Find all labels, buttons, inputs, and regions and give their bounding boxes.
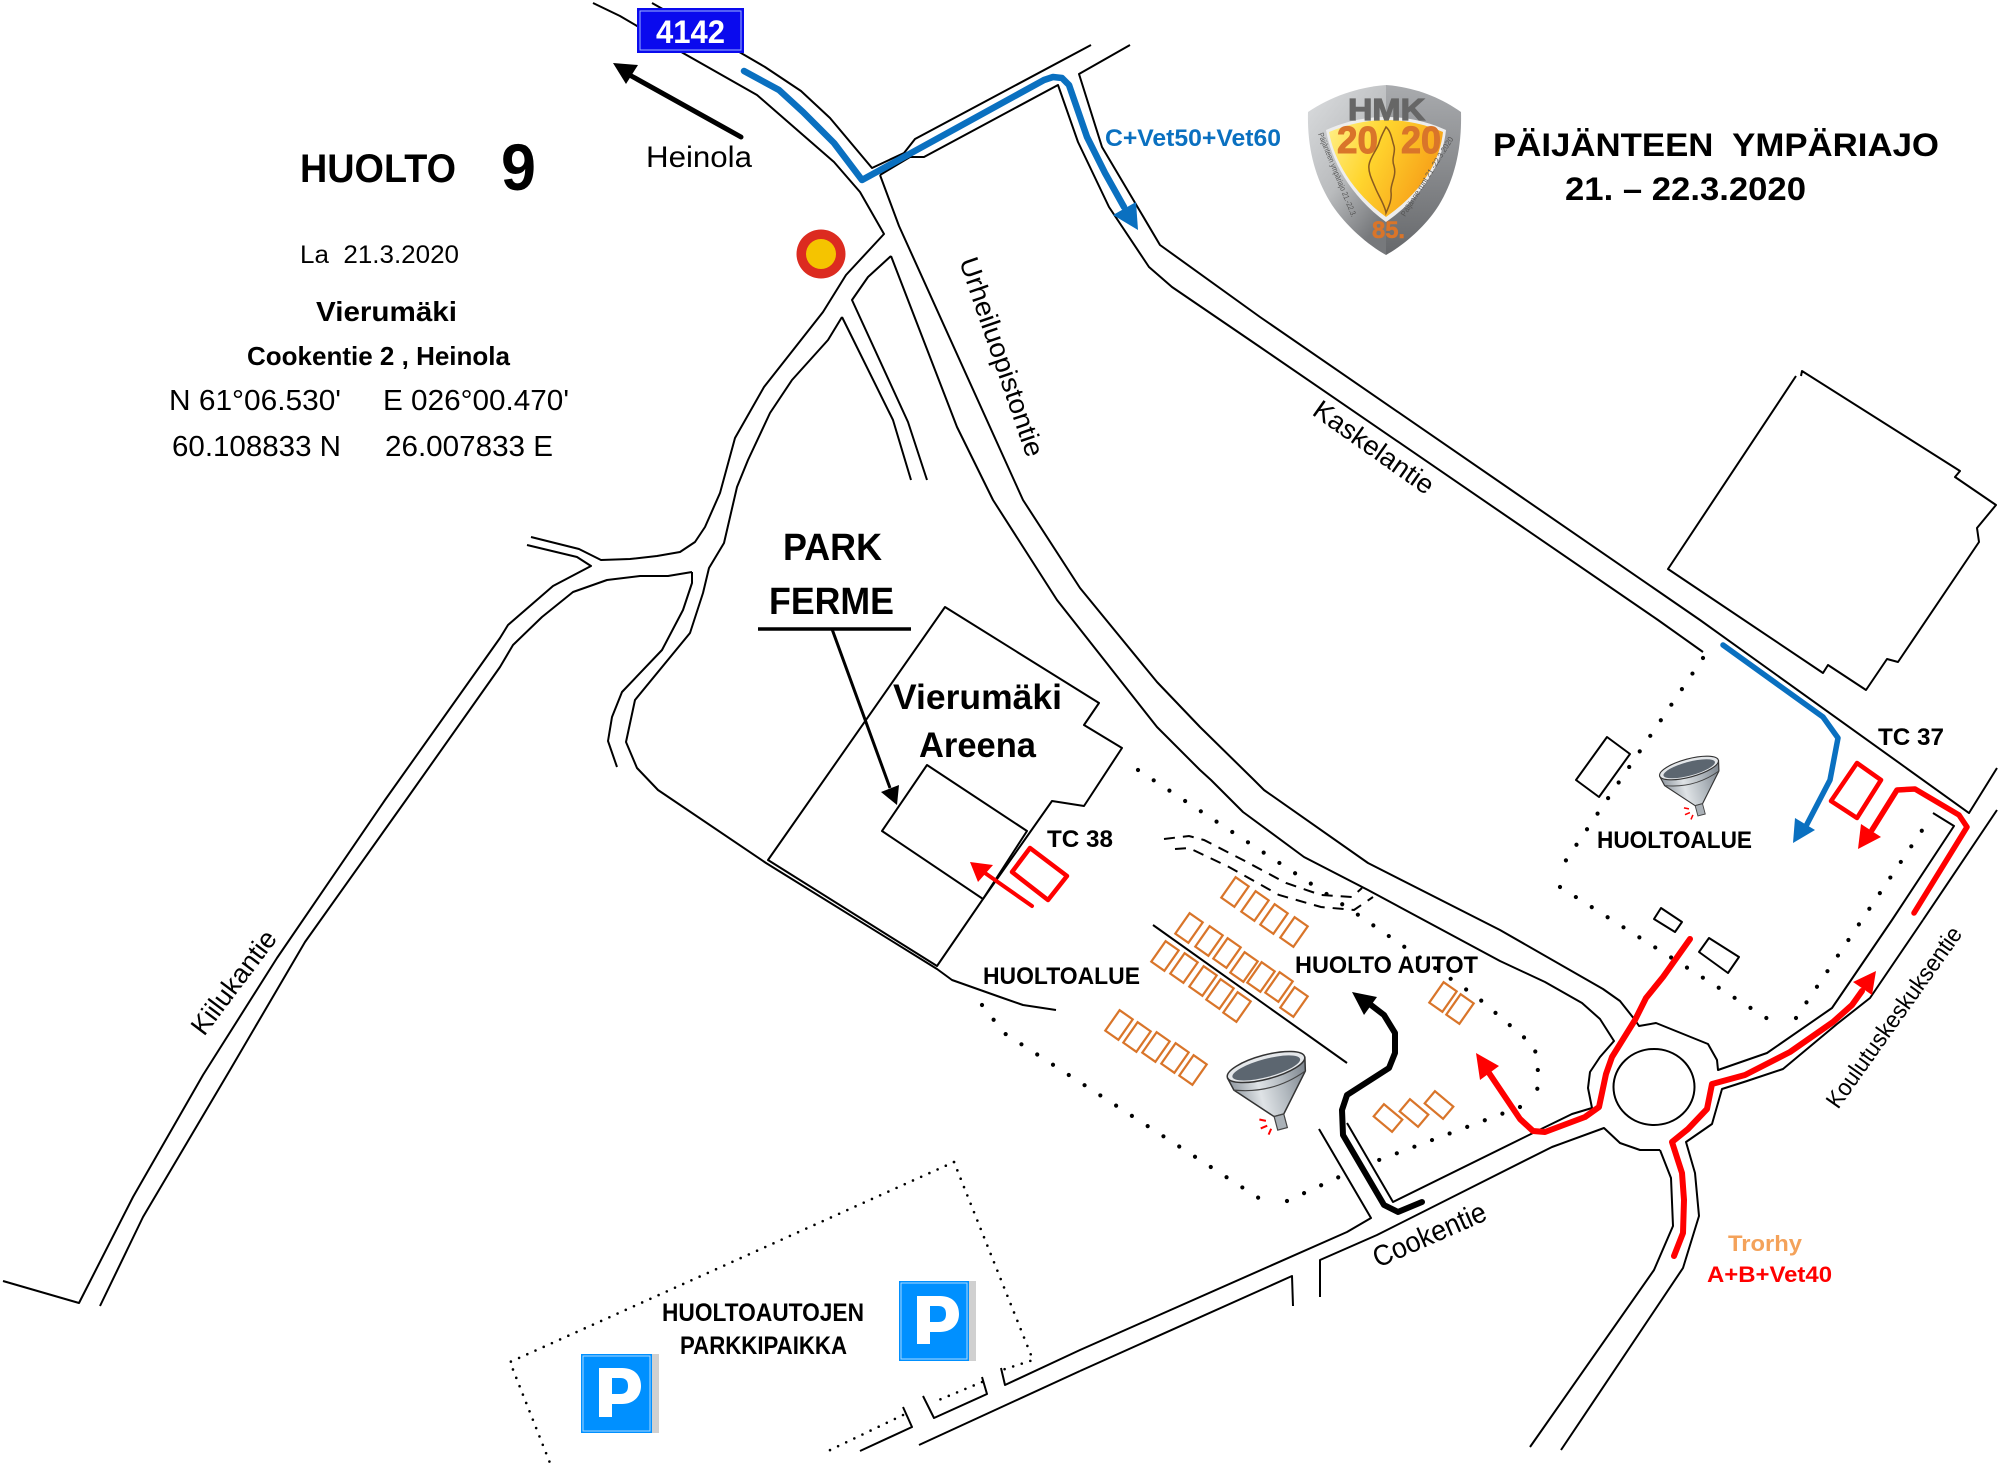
icon: parking sign right xyxy=(899,1281,976,1361)
label: blue route classes: C+Vet50+Vet60 xyxy=(1105,125,1281,152)
text block: coordinates: 26.007833 E xyxy=(385,431,553,463)
service slots xyxy=(1105,877,1474,1132)
label: Park Ferme: PARK xyxy=(783,527,883,569)
text block: date and location: Cookentie 2 , Heinola xyxy=(247,341,511,371)
icon: parking sign left xyxy=(581,1354,659,1433)
label: service car parking: HUOLTOAUTOJEN xyxy=(662,1299,864,1327)
label: Vierumäki Areena: Vierumäki xyxy=(893,678,1062,717)
red route: to TC 37 xyxy=(1858,789,1967,913)
road label: Kiilukantie: Kiilukantie xyxy=(185,924,283,1041)
road label: Urheiluopistontie: Urheiluopistontie xyxy=(953,253,1050,461)
text block: coordinates xyxy=(169,385,569,463)
building: Vierumäki Areena outline xyxy=(768,607,1122,966)
label: Vierumäki Areena: Areena xyxy=(919,726,1037,765)
blue route: C+Vet50+Vet60 top xyxy=(744,71,1138,230)
label: Huoltoalue left: HUOLTOALUE xyxy=(983,963,1140,990)
blue route: to service area xyxy=(1723,645,1838,843)
icon: TC 38 control box xyxy=(1012,848,1067,900)
icon: funnel right xyxy=(1657,751,1731,824)
label: route legend xyxy=(1707,1231,1832,1287)
text block: date and location: Vierumäki xyxy=(316,296,457,327)
logo: HMK shield: Päijänteen ympäriajo 21.-22.3. xyxy=(1316,131,1358,218)
dashed track xyxy=(1164,836,1373,910)
small service buildings xyxy=(1576,737,1739,973)
arrow: Park Ferme pointer xyxy=(758,629,911,805)
title: Huolto 9: 9 xyxy=(501,130,536,204)
icon: road number sign 4142 xyxy=(637,8,744,53)
title: rally name and dates: 21. – 22.3.2020 xyxy=(1565,171,1806,207)
text block: coordinates: N 61°06.530' xyxy=(169,385,341,417)
label: Heinola: Heinola xyxy=(646,141,752,174)
icon: road number sign 4142: 4142 xyxy=(656,14,725,50)
label: TC 38: TC 38 xyxy=(1047,826,1113,853)
label: route legend: Trorhy xyxy=(1728,1231,1803,1256)
title: Huolto 9 xyxy=(300,130,536,204)
dotted service area boundaries xyxy=(982,658,1931,1206)
title: rally name and dates xyxy=(1493,127,1939,207)
label: Park Ferme xyxy=(769,527,894,623)
logo: HMK shield: 20 xyxy=(1337,120,1378,162)
label: service car parking xyxy=(662,1299,864,1360)
red route: through roundabout to Cookentie xyxy=(1476,939,1690,1132)
text block: date and location: La 21.3.2020 xyxy=(300,241,459,269)
red arrow: into Areena xyxy=(970,862,1032,906)
icon: service start marker xyxy=(796,230,846,278)
text block: coordinates: E 026°00.470' xyxy=(383,385,569,417)
logo: HMK shield: HMK xyxy=(1348,92,1426,127)
text block: coordinates: 60.108833 N xyxy=(172,431,341,463)
label: Huolto autot: HUOLTO AUTOT xyxy=(1295,952,1478,979)
icon: TC 37 control box xyxy=(1831,763,1881,818)
label: Park Ferme: FERME xyxy=(769,581,894,623)
logo: HMK shield: 85. xyxy=(1372,217,1405,244)
road label: Koulutuskeskuksentie: Koulutuskeskuksentie xyxy=(1821,922,1968,1113)
logo: HMK shield xyxy=(1308,85,1461,255)
red route: south road to Koulutuskeskuksentie xyxy=(1672,971,1876,1256)
text block: date and location xyxy=(247,241,511,371)
road label: Kaskelantie: Kaskelantie xyxy=(1308,394,1440,500)
label: service car parking: PARKKIPAIKKA xyxy=(680,1332,847,1360)
arrow: to Heinola xyxy=(613,63,741,137)
icon: funnel left xyxy=(1224,1045,1322,1141)
title: Huolto 9: HUOLTO xyxy=(300,147,456,191)
black route: service cars xyxy=(1342,992,1422,1212)
label: route legend: A+B+Vet40 xyxy=(1707,1262,1832,1287)
title: rally name and dates: PÄIJÄNTEEN YMPÄRIAJO xyxy=(1493,127,1939,163)
logo: HMK shield: Päijänne runt 21.-22.3.2020 xyxy=(1399,135,1456,218)
label: Huoltoalue right: HUOLTOALUE xyxy=(1597,827,1752,854)
label: TC 37: TC 37 xyxy=(1878,724,1944,751)
building: sports hall top right xyxy=(1668,371,1996,690)
road label: Cookentie: Cookentie xyxy=(1368,1196,1492,1274)
dotted parking boundary xyxy=(510,1162,1033,1463)
label: Vierumäki Areena xyxy=(893,678,1062,765)
logo: HMK shield: 20 xyxy=(1401,120,1441,162)
